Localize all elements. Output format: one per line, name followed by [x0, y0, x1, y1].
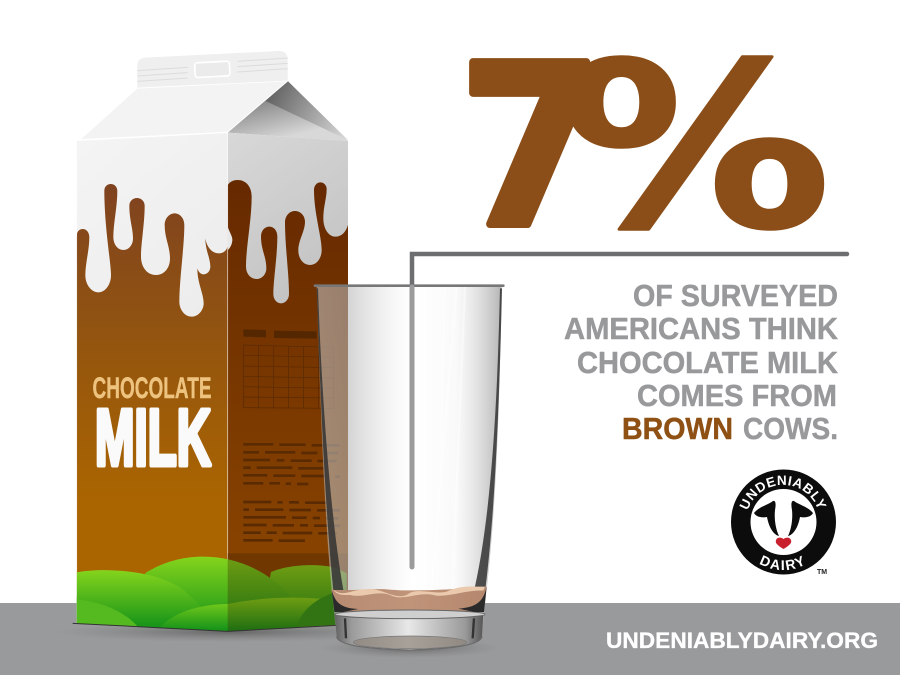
- statement text: AMERICANS THINK: [564, 311, 839, 346]
- cow heart nose: [776, 538, 791, 549]
- logo wordmark bottom: DAIRY: [760, 555, 802, 570]
- carton label: milk: MILK: [95, 393, 211, 482]
- hills on carton: [77, 553, 350, 633]
- glass base: [334, 610, 485, 650]
- chocolate drip front: [77, 184, 228, 640]
- glass body: [317, 287, 502, 650]
- statement text: BROWN: [622, 411, 733, 446]
- side shade on hills: [228, 553, 350, 633]
- ingredient text lines: [243, 444, 340, 541]
- carton top fin: [137, 51, 288, 88]
- statement text: CHOCOLATE MILK: [577, 345, 839, 380]
- trademark: TM: [817, 569, 827, 576]
- glass rim: [315, 282, 503, 290]
- connector line: [412, 254, 847, 286]
- front face edge highlight: [77, 133, 228, 631]
- milk residue: [331, 586, 487, 613]
- digit 7: 7: [459, 19, 603, 277]
- statement text: COMES FROM: [637, 378, 837, 413]
- big number 7%: [459, 14, 831, 280]
- statement text: [564, 278, 839, 446]
- glass shadow: [320, 638, 500, 658]
- connector line inside glass: [410, 287, 414, 567]
- chocolate milk carton: [73, 51, 350, 640]
- carton bottom edge: [73, 623, 337, 631]
- floor band: [0, 603, 900, 675]
- statement text: COWS.: [743, 411, 838, 446]
- logo wordmark top: UNDENIABLY: [739, 476, 827, 509]
- website url: UNDENIABLYDAIRY.ORG: [606, 628, 878, 653]
- cow face patches: [754, 501, 813, 536]
- percent sign: %: [560, 14, 831, 280]
- carton roof panel: [81, 81, 288, 139]
- chocolate drip side: [228, 180, 348, 640]
- glass of milk: [315, 286, 503, 650]
- statement text: OF SURVEYED: [633, 278, 838, 313]
- carton shadow: [55, 622, 405, 642]
- carton label: chocolate: CHOCOLATE: [92, 372, 212, 405]
- Undeniably Dairy logo: [731, 470, 836, 576]
- glass reflections: [427, 287, 465, 647]
- carton front face: [77, 130, 228, 640]
- nutrition header bars: [243, 329, 317, 339]
- carton gable: [228, 81, 348, 141]
- glass dark walls: [317, 288, 343, 590]
- nutrition table: [243, 345, 333, 408]
- carton side face: [224, 130, 348, 640]
